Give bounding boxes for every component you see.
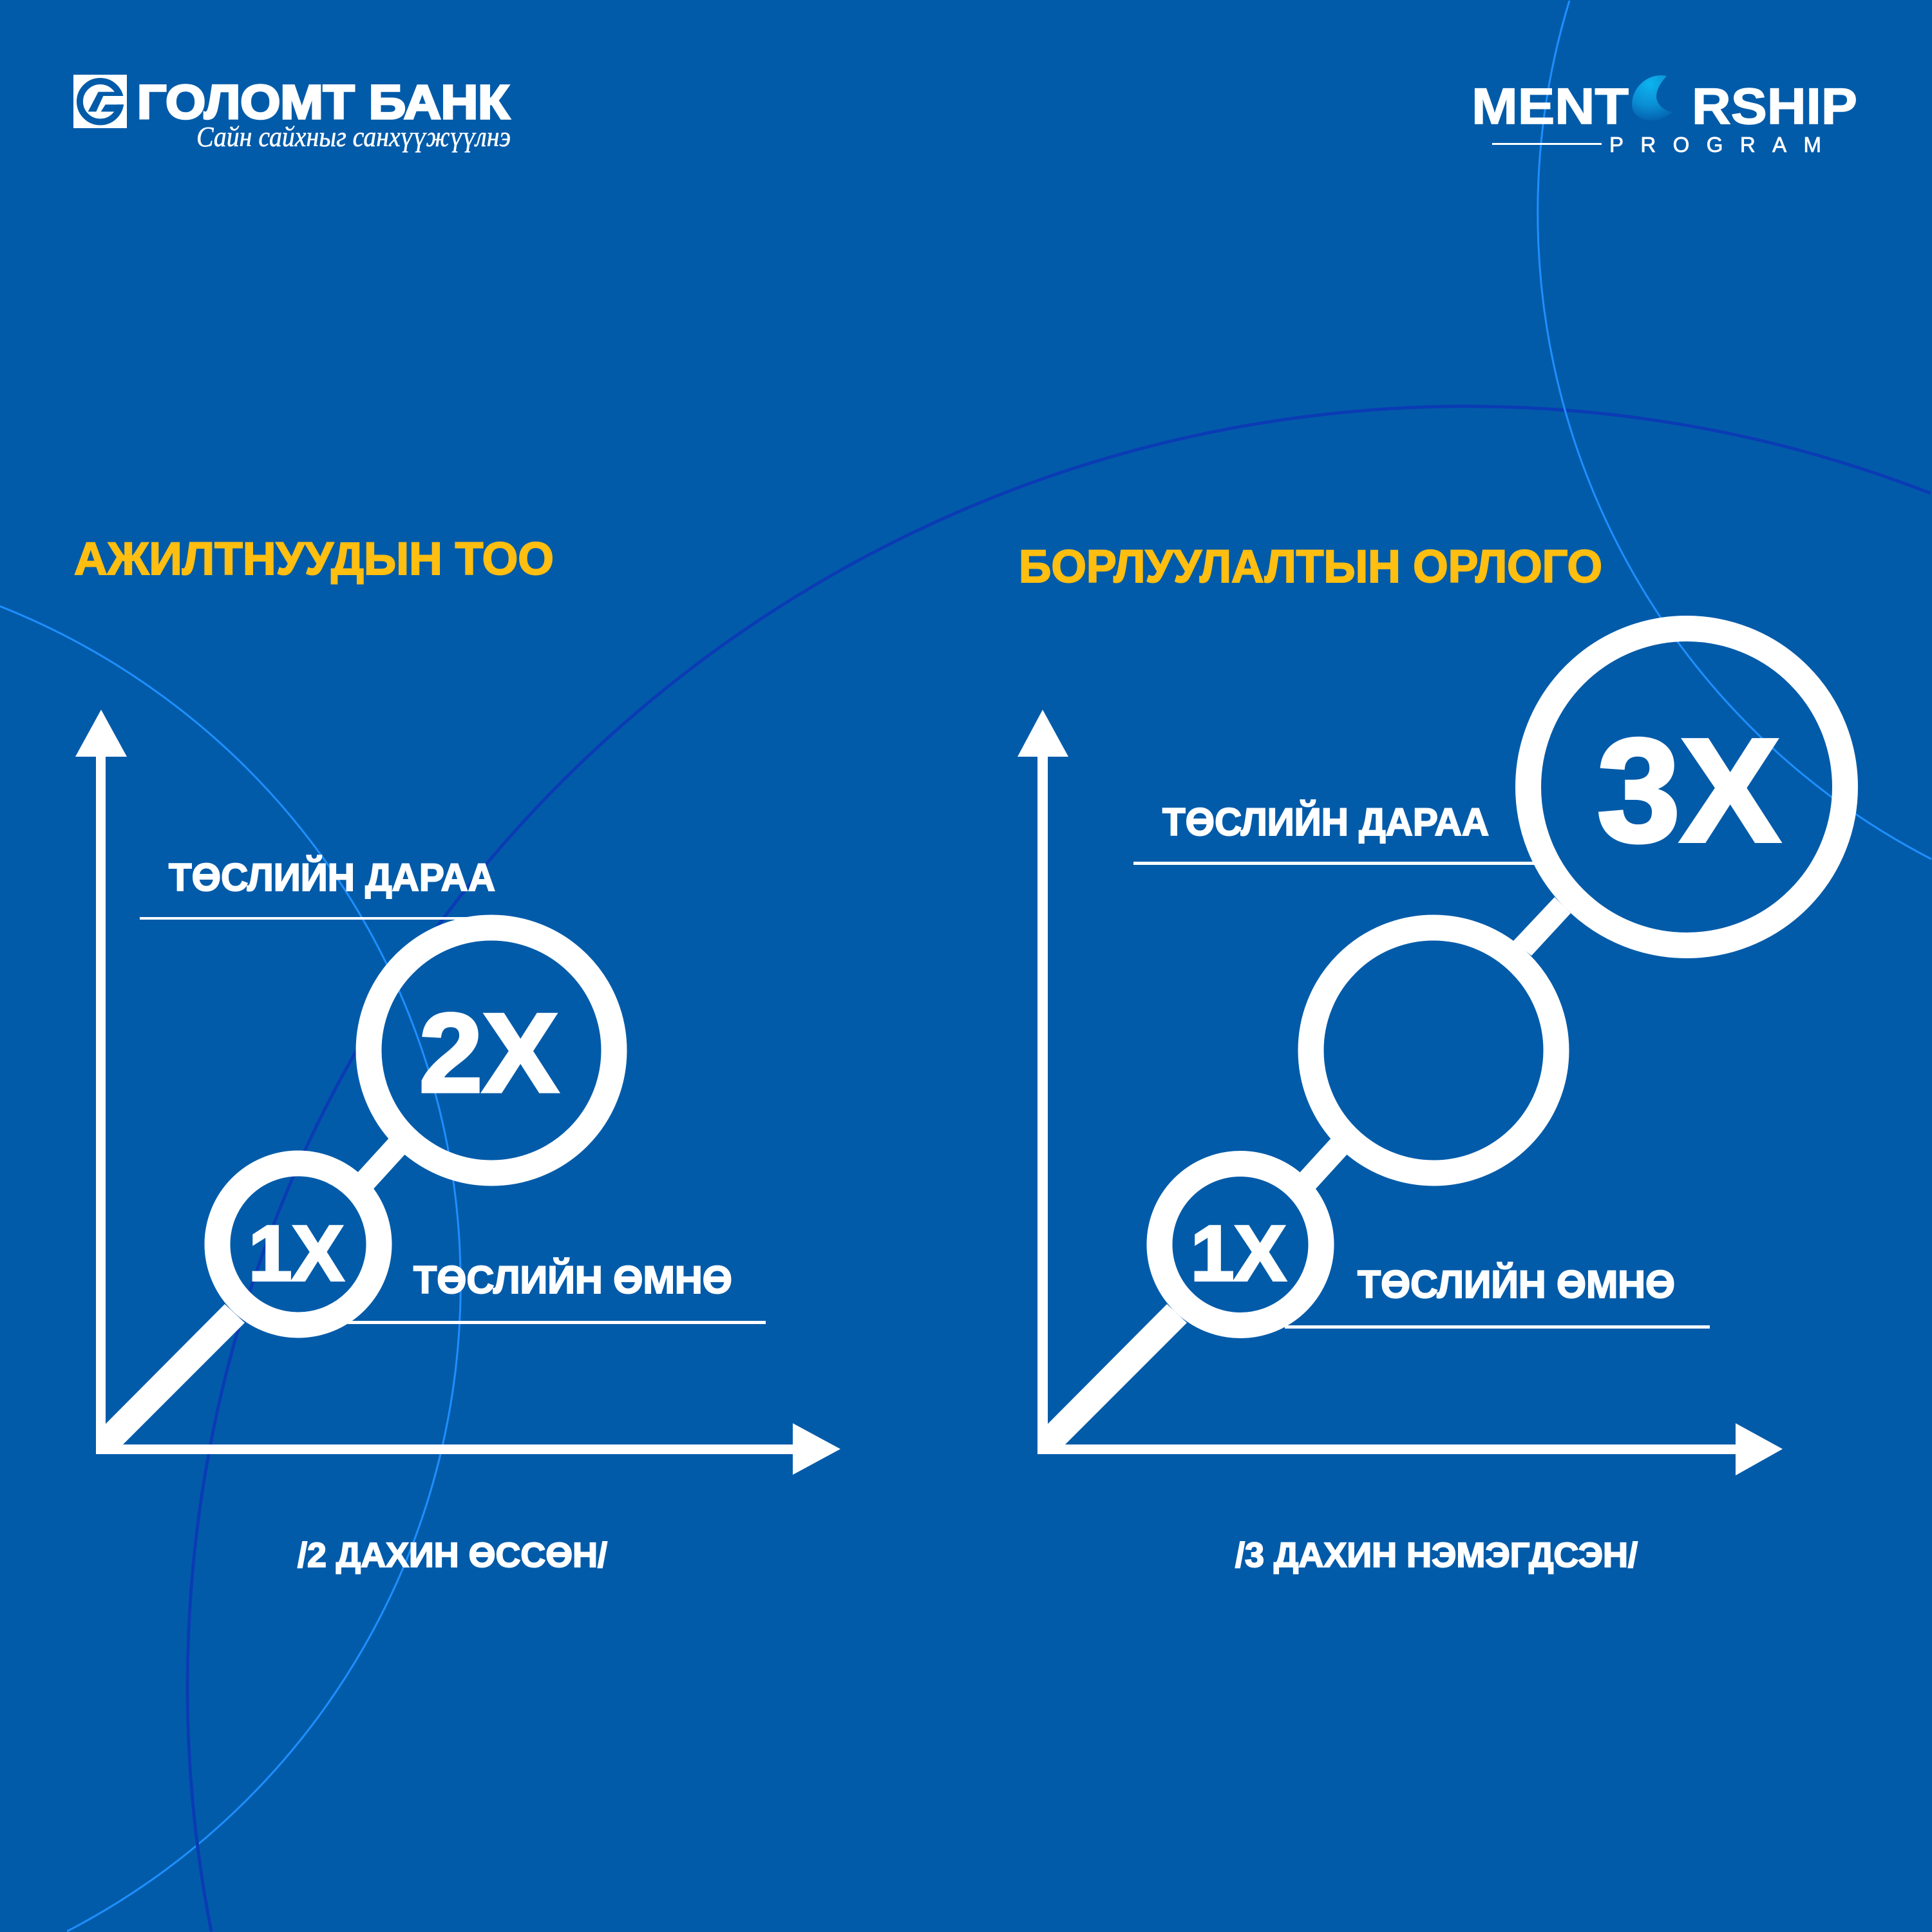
wordmark left: MENT (1472, 77, 1629, 135)
value 3X: 3X (1597, 709, 1780, 873)
panel: sales revenue chart (1018, 629, 1845, 1575)
leader lines (1133, 862, 1710, 1329)
node: 3X (1528, 629, 1845, 945)
label before project: ТӨСЛИЙН ӨМНӨ (413, 1258, 732, 1302)
node: 1X (218, 1163, 379, 1325)
program label: PROGRAM (1609, 133, 1821, 156)
icon: crescent letter O (1632, 75, 1672, 120)
label before project: ТӨСЛИЙН ӨМНӨ (1358, 1263, 1675, 1306)
value 2X: 2X (419, 990, 558, 1115)
bank name: ГОЛОМТ БАНК (137, 75, 510, 129)
heading: employees: АЖИЛТНУУДЫН ТОО (74, 534, 554, 585)
caption: /2 ДАХИН ӨССӨН/ (298, 1536, 607, 1575)
growth line (1048, 897, 1571, 1444)
node: intermediate empty (1311, 927, 1556, 1173)
node: 2X (368, 927, 614, 1173)
axes with arrows (75, 710, 840, 1475)
value 1X: 1X (1191, 1209, 1286, 1297)
label after project: ТӨСЛИЙН ДАРАА (1162, 800, 1489, 844)
logo: Mentorship Program (1472, 75, 1857, 156)
value 1X: 1X (249, 1209, 344, 1297)
axes with arrows (1018, 710, 1783, 1475)
program line (1492, 143, 1602, 145)
growth line (106, 1129, 413, 1444)
leader lines (140, 917, 766, 1324)
caption: /3 ДАХИН НЭМЭГДСЭН/ (1235, 1536, 1638, 1575)
slogan: Сайн сайхныг санхүүжүүлнэ (196, 121, 511, 153)
wordmark right: RSHIP (1692, 77, 1857, 135)
icon: Golomt emblem (73, 75, 127, 128)
panel: employees chart (75, 710, 840, 1575)
heading: sales revenue: БОРЛУУЛАЛТЫН ОРЛОГО (1019, 542, 1602, 592)
node: 1X (1159, 1164, 1321, 1325)
logo: Golomt Bank (73, 75, 511, 153)
label after project: ТӨСЛИЙН ДАРАА (169, 856, 495, 899)
